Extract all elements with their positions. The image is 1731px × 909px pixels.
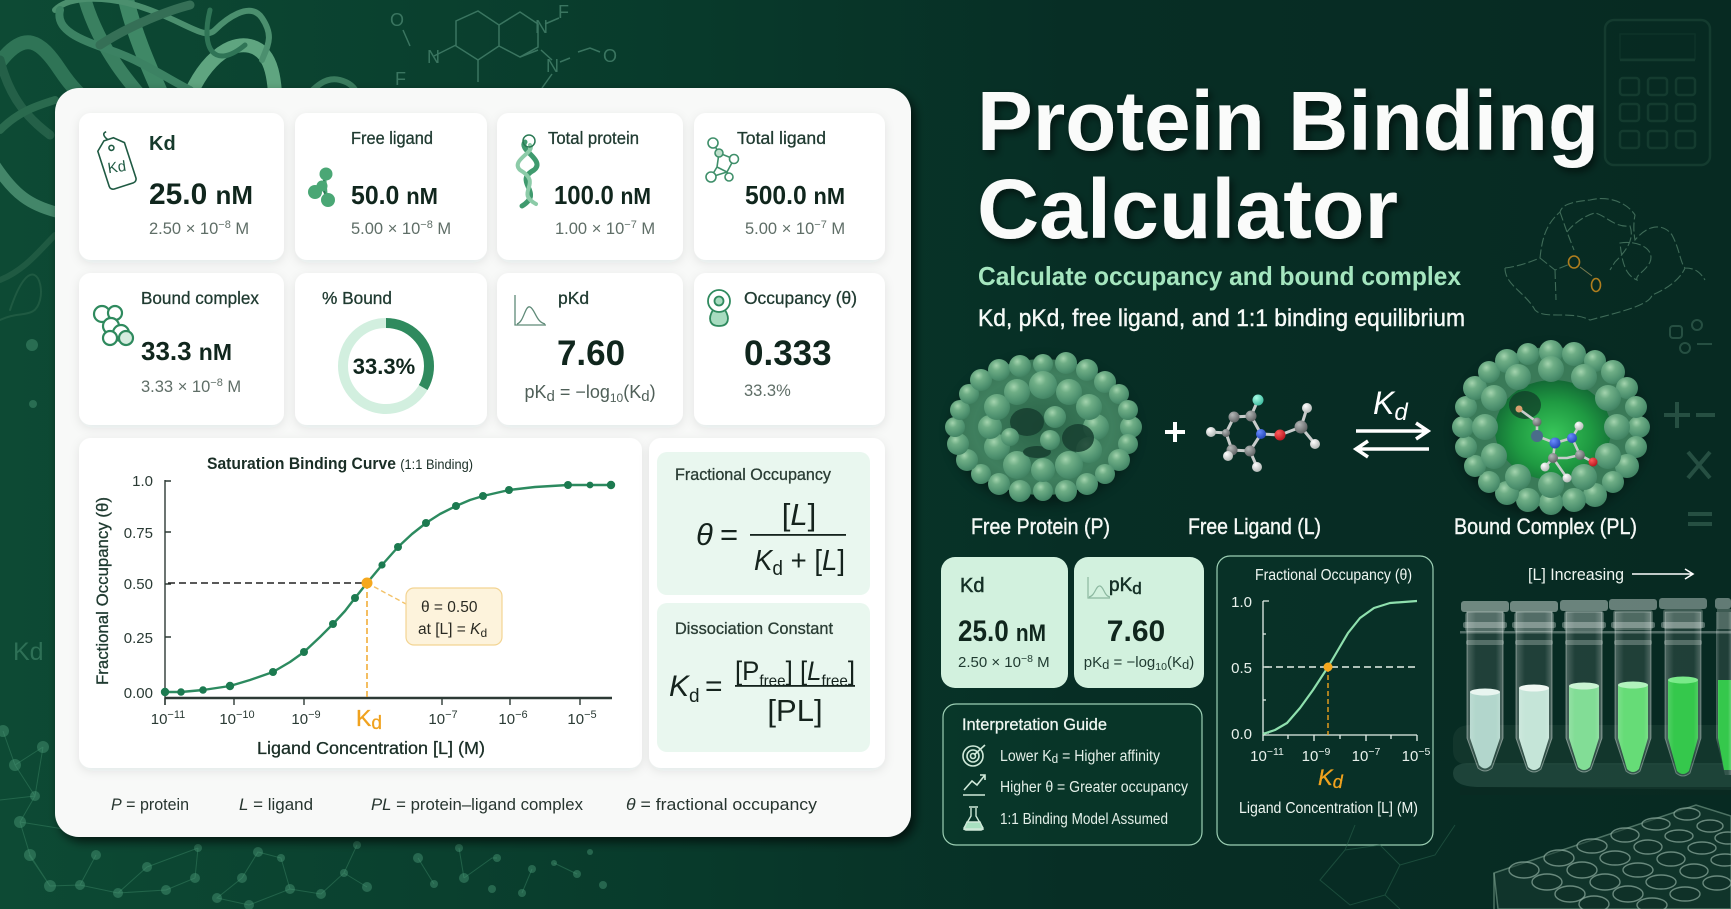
plus sign — [1165, 422, 1185, 442]
summary card: pKd: ) — [1189, 654, 1194, 671]
mini x labels: −11 — [1267, 746, 1284, 758]
pocket rim — [1472, 356, 1630, 498]
card: % Bound: % Bound — [322, 288, 392, 308]
card: Bound complex: −8 — [210, 377, 223, 389]
formula: dissociation constant: = — [705, 670, 723, 703]
panel: calculator results — [55, 88, 911, 837]
mini x labels: 10 — [1402, 748, 1418, 765]
tube 1 — [1461, 601, 1509, 771]
equilibrium label: d — [1394, 399, 1408, 426]
card: Total ligand: Total ligand — [737, 128, 826, 148]
tube 5 — [1659, 598, 1707, 776]
background: chemical structure: O — [603, 46, 617, 66]
half occupancy point — [362, 578, 372, 588]
card: Total ligand: M — [827, 220, 845, 238]
legend: PL = protein–ligand complex — [371, 795, 583, 814]
callout: at [L] = K — [418, 621, 480, 638]
background: dashed molecule outline — [1505, 199, 1705, 320]
card: Total ligand: 500.0 nM — [745, 180, 845, 210]
x tick labels: −11 — [167, 709, 185, 721]
illustration: well plate — [1494, 805, 1731, 909]
card: Bound complex: Bound complex — [141, 288, 259, 308]
card: pKd: pK — [524, 382, 546, 402]
formula: dissociation constant: [PL] — [767, 693, 823, 728]
y tick labels: 0.00 — [124, 685, 153, 702]
description: Kd, pKd, free ligand, and 1:1 binding equilibrium — [978, 305, 1465, 332]
x tick labels: 10 — [498, 711, 515, 728]
icon: Kd tag: Kd — [107, 158, 127, 177]
x tick labels: 10 — [291, 711, 308, 728]
y tick labels: 0.25 — [124, 630, 153, 647]
mini y labels: 1.0 — [1231, 594, 1252, 611]
formula: dissociation constant: L — [807, 656, 822, 686]
card: pKd: 7.60 — [557, 334, 625, 373]
tube 4 — [1609, 599, 1657, 774]
equilibrium arrows — [1356, 423, 1429, 457]
icon: ligand dots — [308, 168, 335, 207]
icon: rising trend — [963, 775, 985, 795]
mini x labels: 10 — [1250, 748, 1267, 765]
tube 3 — [1560, 600, 1608, 772]
background: calculator icon — [1605, 20, 1710, 165]
panel: interpretation guide: Lower K — [1000, 748, 1057, 765]
formula: fractional occupancy: = — [720, 517, 738, 552]
card: pKd: 10 — [610, 391, 624, 405]
formula: fractional occupancy: Fractional Occupancy — [675, 465, 831, 484]
background: faint hex lattice — [1320, 825, 1455, 909]
callout — [406, 588, 502, 645]
mini axes — [1263, 601, 1417, 741]
x tick labels: −10 — [236, 709, 255, 721]
reference lines — [168, 583, 406, 698]
formula: dissociation constant: K — [669, 670, 689, 703]
card: Free ligand: M — [433, 220, 451, 238]
card: % Bound — [295, 273, 487, 425]
legend: L = ligand — [239, 795, 313, 814]
panel: interpretation guide: 1:1 Binding Model Assumed — [1000, 811, 1168, 828]
mini x labels: −7 — [1368, 746, 1380, 758]
title — [977, 74, 1599, 256]
card: pKd: d — [641, 388, 650, 405]
y tick labels: 1.0 — [132, 473, 153, 490]
summary card: Kd: 2.50 × 10 — [958, 654, 1021, 671]
y tick labels — [124, 473, 153, 702]
panel: interpretation guide — [943, 704, 1202, 845]
mini x labels: −5 — [1418, 746, 1430, 758]
card: Occupancy: Occupancy (θ) — [744, 288, 857, 308]
title: Calculator — [977, 162, 1398, 256]
card: pKd: ) — [650, 382, 656, 402]
background: chemical structure: O — [390, 10, 404, 30]
card: Kd — [79, 113, 284, 260]
card: pKd — [497, 273, 683, 425]
icon: flask — [964, 807, 983, 830]
summary card: pKd: = −log — [1109, 654, 1155, 671]
panel: interpretation guide: Higher θ = Greater occupancy — [1000, 779, 1188, 796]
summary card: pKd: d — [1132, 579, 1142, 598]
card: pKd: (K — [623, 382, 641, 402]
chart title: Saturation Binding Curve (1:1 Binding) — [207, 455, 473, 473]
summary card: pKd: d — [1102, 657, 1109, 672]
legend: θ = fractional occupancy — [626, 795, 818, 814]
Kd axis marker: K — [356, 705, 371, 731]
card: Kd: M — [231, 220, 249, 238]
card: Free ligand — [295, 113, 487, 260]
mini x labels: 10 — [1352, 748, 1368, 765]
x tick labels: −6 — [515, 709, 528, 721]
binding pocket — [1495, 380, 1611, 480]
formula: dissociation constant: Dissociation Constant — [675, 619, 833, 638]
background: maths symbols — [1664, 320, 1715, 524]
axes and ticks — [165, 480, 612, 705]
callout: d — [480, 626, 487, 640]
icon: ligand molecule — [706, 138, 738, 182]
summary card: pKd: 10 — [1155, 661, 1167, 673]
panel: saturation binding curve — [79, 438, 642, 768]
background: chemical structure: N — [535, 17, 548, 37]
formula: dissociation constant: ] — [848, 656, 855, 686]
summary card: Kd: 25.0 nM — [958, 615, 1046, 648]
panel: interpretation guide: Interpretation Guide — [962, 715, 1107, 734]
card: % Bound: 33.3% — [353, 354, 415, 379]
background: chemical structure: N — [427, 47, 440, 67]
card: Total ligand: −7 — [814, 219, 827, 231]
equilibrium label: K — [1373, 385, 1394, 421]
subtitle: Calculate occupancy and bound complex — [978, 261, 1462, 291]
card: Total protein — [497, 113, 683, 260]
formula: dissociation constant — [657, 603, 870, 752]
summary card: Kd — [941, 557, 1068, 688]
icon: target — [963, 745, 985, 766]
background: molecular network — [0, 339, 607, 909]
icon: bound complex — [94, 306, 133, 345]
Kd axis marker: d — [371, 713, 382, 734]
formula: fractional occupancy: θ — [696, 517, 713, 552]
mini curve — [1263, 601, 1417, 734]
card: Free ligand: Free ligand — [351, 128, 433, 148]
summary card: pKd: pK — [1109, 575, 1132, 596]
panel: fractional occupancy mini chart — [1217, 556, 1433, 845]
formula: fractional occupancy — [657, 452, 870, 595]
background: chemical structure: N — [546, 56, 559, 76]
illustration: free protein — [945, 352, 1142, 504]
x tick labels: 10 — [567, 711, 584, 728]
card: Bound complex: 33.3 nM — [141, 336, 232, 366]
card: pKd: d — [546, 388, 555, 405]
panel: fractional occupancy mini chart: Ligand Concentration [L] (M) — [1239, 800, 1418, 817]
formula: fractional occupancy: d — [772, 558, 783, 580]
callout: θ = 0.50 — [421, 599, 478, 616]
illustration labels: Bound Complex (PL) — [1454, 514, 1637, 539]
mini y labels: 0.5 — [1231, 660, 1252, 677]
summary card: Kd: −8 — [1021, 653, 1033, 665]
summary card: Kd: Kd — [960, 575, 984, 597]
x axis label: Ligand Concentration [L] (M) — [257, 738, 485, 758]
card: Total ligand — [694, 113, 885, 260]
card: Kd: 2.50 × 10 — [149, 220, 218, 238]
background: faint Kd label: Kd — [13, 638, 44, 666]
illustration labels: Free Protein (P) — [971, 514, 1110, 539]
bound ligand — [1516, 406, 1598, 482]
binding curve — [165, 485, 611, 692]
mini x labels — [1250, 746, 1430, 765]
y tick labels: 0.75 — [124, 525, 153, 542]
title: Protein Binding — [977, 74, 1599, 168]
formula: dissociation constant: ] [ — [786, 656, 808, 686]
legend — [111, 795, 818, 814]
panel: formulas — [649, 438, 885, 768]
card: Occupancy: 33.3% — [744, 382, 791, 400]
card: Occupancy — [694, 273, 885, 425]
formula: dissociation constant: free — [822, 673, 848, 690]
x tick labels: −7 — [445, 709, 458, 721]
formula: fractional occupancy: K — [754, 545, 774, 577]
icon: small chart — [1088, 577, 1110, 598]
card: Kd: 25.0 nM — [149, 178, 253, 211]
card: Total protein: −7 — [624, 219, 637, 231]
panel: interpretation guide: d — [1052, 751, 1058, 766]
illustration: free ligand — [1206, 394, 1320, 472]
background: chemical structure: F — [395, 69, 406, 89]
mini Kd label: d — [1333, 772, 1344, 792]
summary card: pKd: 7.60 — [1107, 615, 1165, 648]
formula: fractional occupancy: + [ — [783, 545, 822, 577]
card: Total protein: 1.00 × 10 — [555, 220, 624, 238]
y tick labels: 0.50 — [124, 576, 153, 593]
card: Bound complex: 3.33 × 10 — [141, 378, 210, 396]
x tick labels: 10 — [219, 711, 236, 728]
mini Kd label: K — [1318, 765, 1333, 790]
icon: occupancy — [708, 290, 730, 326]
mini half point — [1324, 662, 1332, 672]
illustration: test tubes — [1461, 598, 1731, 776]
card: Total protein: Total protein — [548, 128, 639, 148]
curve data points — [161, 481, 615, 696]
card: pKd: = −log — [555, 382, 610, 402]
summary card: pKd: d — [1182, 657, 1189, 672]
card: Total protein: M — [637, 220, 655, 238]
tube 2 — [1510, 601, 1558, 772]
mini x labels: −9 — [1318, 746, 1330, 758]
panel: fractional occupancy mini chart: Fractional Occupancy (θ) — [1255, 567, 1412, 584]
mini y labels: 0.0 — [1231, 726, 1252, 743]
x tick labels: 10 — [428, 711, 445, 728]
icon: pKd mini chart — [515, 295, 546, 325]
mini x labels: 10 — [1302, 748, 1318, 765]
panel: interpretation guide: = Higher affinity — [1058, 748, 1160, 765]
illustration: bound complex — [1452, 340, 1650, 516]
legend: P = protein — [111, 795, 189, 814]
summary card: pKd: (K — [1167, 654, 1182, 671]
x tick labels — [151, 709, 597, 728]
x tick labels: −5 — [584, 709, 597, 721]
illustration labels: Free Ligand (L) — [1188, 514, 1321, 539]
formula: fractional occupancy: [L] — [782, 497, 816, 532]
formula: dissociation constant: d — [689, 686, 700, 707]
card: Bound complex — [79, 273, 284, 425]
donut chart — [343, 323, 429, 409]
mini y labels — [1231, 594, 1252, 743]
x tick labels: −9 — [308, 709, 321, 721]
background: molecule accent atoms — [1568, 256, 1600, 292]
background: chemical structure: F — [558, 2, 569, 22]
card: Free ligand: −8 — [420, 219, 433, 231]
card: Bound complex: M — [223, 378, 241, 396]
summary card: pKd: pK — [1084, 654, 1102, 671]
illustration: tube rack — [1453, 631, 1731, 795]
mini dashed guides — [1265, 667, 1418, 735]
label: ligand increasing — [1528, 565, 1693, 584]
background: protein ribbons — [0, 0, 359, 320]
card: Occupancy: 0.333 — [744, 334, 832, 373]
formula: dissociation constant: [P — [735, 656, 761, 686]
label: ligand increasing: [L] Increasing — [1528, 565, 1624, 584]
icon: protein helix — [518, 135, 537, 206]
card: Total protein: 100.0 nM — [554, 180, 651, 210]
formula: fractional occupancy: L] — [822, 545, 845, 577]
illustration labels — [971, 514, 1637, 539]
formula: dissociation constant: free — [759, 673, 786, 690]
card: Total ligand: 5.00 × 10 — [745, 220, 814, 238]
x tick labels: 10 — [151, 711, 167, 728]
tube 6 — [1715, 598, 1731, 775]
background: chemical structure — [390, 2, 617, 89]
card: Free ligand: 5.00 × 10 — [351, 220, 420, 238]
summary card: Kd: M — [1033, 654, 1050, 671]
icon: Kd tag — [93, 127, 137, 190]
card: pKd: pKd — [558, 288, 589, 308]
card: Kd: Kd — [149, 133, 176, 155]
summary card: pKd — [1074, 557, 1204, 688]
card: Free ligand: 50.0 nM — [351, 180, 438, 210]
card: Kd: −8 — [218, 219, 231, 231]
y axis label: Fractional Occupancy (θ) — [94, 497, 112, 685]
